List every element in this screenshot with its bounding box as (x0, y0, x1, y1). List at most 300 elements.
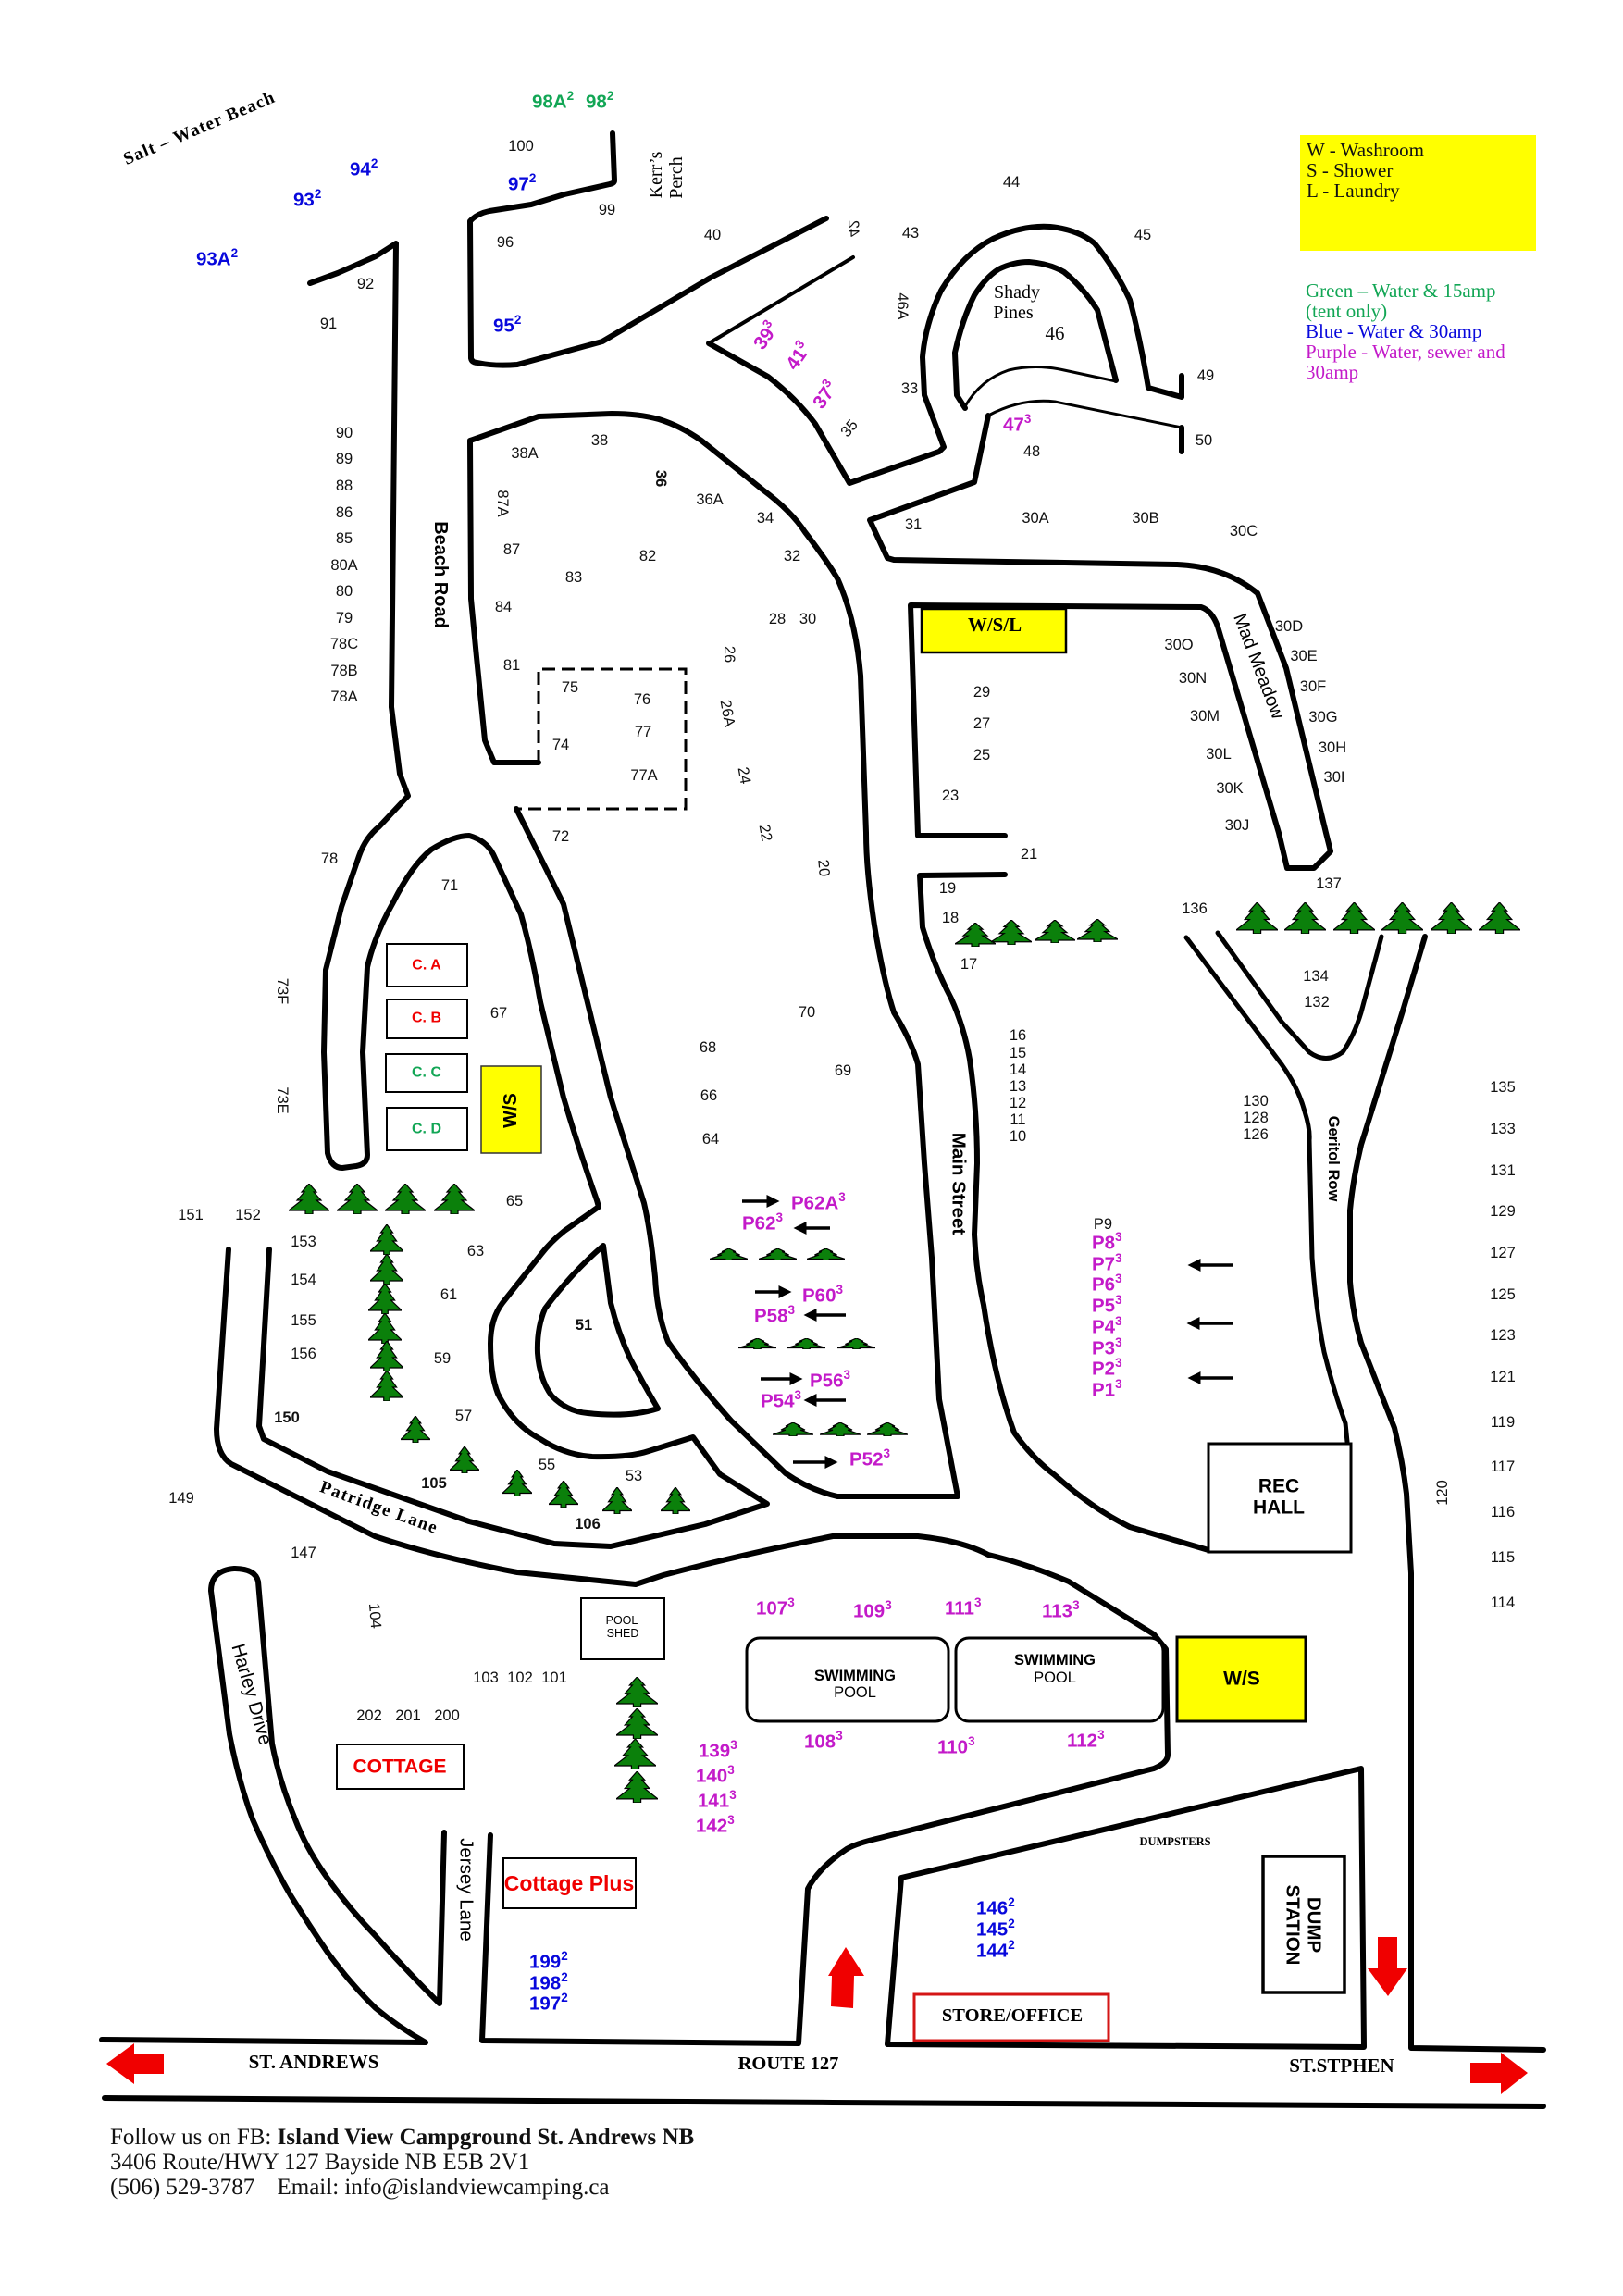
coloured service sites: purple: 140 (696, 1766, 727, 1786)
site numbers: 126 (1243, 1126, 1269, 1143)
coloured service sites: blue: 2 (315, 187, 321, 200)
coloured service sites: purple: 3 (1115, 1334, 1122, 1349)
building: dump station: DUMP (1303, 1897, 1325, 1953)
site numbers: 38A (511, 445, 539, 462)
area and road names (120, 88, 1394, 2077)
coloured service sites: purple: P1 (1092, 1379, 1115, 1401)
site numbers: 82 (639, 548, 656, 565)
site numbers: 129 (1490, 1203, 1516, 1220)
red arrow: to St. Andrews (106, 2043, 164, 2084)
coloured service sites: purple: 139 (699, 1740, 730, 1762)
site numbers: 133 (1490, 1121, 1516, 1137)
site numbers: 87A (494, 490, 511, 517)
coloured service sites: purple: 3 (883, 1446, 890, 1460)
coloured service sites: blue: 198 (529, 1973, 561, 1993)
site numbers: 135 (1490, 1079, 1516, 1096)
area and road names: ST. ANDREWS (249, 2051, 378, 2073)
site numbers: 128 (1243, 1110, 1269, 1126)
site numbers: 30I (1324, 769, 1344, 786)
site numbers: 99 (599, 202, 615, 218)
site numbers: 86 (336, 504, 353, 521)
coloured service sites: purple: P60 (802, 1285, 836, 1307)
site numbers: 59 (434, 1350, 451, 1367)
coloured service sites: blue: 2 (371, 155, 378, 170)
site numbers: 66 (700, 1087, 717, 1104)
site numbers: 73F (274, 978, 291, 1004)
site numbers: 116 (1491, 1504, 1515, 1520)
site numbers: 149 (168, 1490, 194, 1507)
site numbers: 68 (700, 1039, 716, 1056)
area and road names: Shady (994, 282, 1040, 303)
site numbers: 77 (635, 724, 651, 740)
site numbers: 14 (1010, 1061, 1026, 1078)
swimming pool 2: POOL (1034, 1669, 1076, 1686)
road outlines (102, 133, 1543, 2106)
site numbers: 63 (467, 1243, 484, 1260)
coloured service sites: blue: 146 (976, 1897, 1008, 1919)
coloured service sites: blue: 2 (561, 1969, 568, 1984)
coloured service sites: purple: 3 (1115, 1272, 1122, 1285)
coloured service sites: green: 2 (607, 89, 613, 102)
area and road names: Beach Road (430, 521, 451, 628)
site numbers: 200 (434, 1707, 460, 1724)
site numbers: 72 (552, 828, 569, 845)
site numbers: 33 (901, 380, 918, 397)
coloured service sites: purple: 3 (1115, 1251, 1122, 1264)
site numbers: 104 (365, 1603, 384, 1629)
black site arrows (742, 1201, 1233, 1462)
site numbers: 81 (503, 657, 520, 674)
site numbers: 20 (814, 859, 833, 877)
coloured service sites: blue: 199 (529, 1951, 561, 1973)
coloured service sites: blue: 95 (493, 315, 514, 337)
site numbers: 137 (1316, 875, 1342, 892)
red arrow: entrance (828, 1947, 864, 2008)
building: W/S small (481, 1066, 541, 1153)
site numbers: 201 (395, 1707, 421, 1724)
site numbers: 30J (1225, 817, 1249, 834)
building: cottage: COTTAGE (353, 1756, 447, 1777)
site numbers: 24 (735, 765, 753, 786)
coloured service sites: blue: 94 (350, 159, 371, 180)
site numbers: 80A (330, 557, 358, 574)
coloured service sites: blue: 2 (1008, 1895, 1015, 1908)
area and road names: ROUTE 127 (738, 2054, 838, 2074)
site numbers: 117 (1491, 1458, 1515, 1475)
site numbers: 40 (704, 227, 721, 243)
site numbers: 65 (506, 1193, 523, 1210)
coloured service sites: purple: 108 (804, 1731, 836, 1753)
coloured service sites: blue: 2 (561, 1990, 568, 2004)
site numbers: 38 (591, 432, 608, 449)
coloured service sites: purple: 47 (1003, 415, 1024, 435)
site numbers: 45 (1134, 227, 1151, 243)
building: dump station: STATION (1282, 1885, 1303, 1965)
red arrow: exit (1368, 1937, 1407, 1996)
coloured service sites: purple: 113 (1042, 1601, 1072, 1621)
site numbers: 30A (1022, 510, 1049, 527)
site numbers: 74 (552, 737, 569, 753)
site numbers: 87 (503, 541, 520, 558)
site numbers: 44 (1003, 174, 1020, 191)
site numbers: 30G (1308, 709, 1338, 726)
site numbers: 96 (497, 234, 514, 251)
coloured service sites: blue: 144 (976, 1940, 1008, 1962)
site numbers: 30M (1190, 708, 1220, 725)
coloured service sites: purple: 41 (782, 344, 812, 374)
site numbers: 134 (1303, 968, 1329, 985)
site numbers: 106 (575, 1516, 601, 1533)
site numbers: 27 (973, 715, 990, 732)
site numbers: 36A (696, 491, 724, 508)
legend: site colours: Purple - Water, sewer and (1306, 341, 1505, 363)
site numbers: 154 (291, 1272, 316, 1288)
building: cottage plus (503, 1858, 636, 1908)
coloured service sites: green (532, 89, 613, 113)
legend: site colours: (tent only) (1306, 300, 1387, 322)
area and road names: Mad Meadow (1229, 611, 1288, 723)
legend: facilities: L - Laundry (1307, 180, 1400, 202)
coloured service sites: purple: 3 (836, 1283, 843, 1296)
building: W/S large: W/S (1223, 1668, 1260, 1690)
site numbers: 79 (336, 610, 353, 627)
building: rec hall: HALL (1253, 1497, 1305, 1518)
coloured service sites: purple: 3 (1115, 1292, 1122, 1307)
site numbers: 100 (508, 138, 534, 155)
site numbers: 13 (1010, 1078, 1026, 1095)
site numbers: 83 (565, 569, 582, 586)
building: store/office: STORE/OFFICE (942, 2005, 1083, 2026)
coloured service sites: purple: 3 (730, 1738, 737, 1751)
legend: facilities: W - Washroom (1307, 139, 1424, 161)
coloured service sites: blue: 2 (231, 246, 238, 259)
area and road names: Salt – Water Beach (120, 88, 278, 169)
building: pool shed (581, 1598, 664, 1659)
site numbers: 30F (1300, 678, 1326, 695)
cabin: C. A (387, 944, 467, 987)
coloured service sites: purple: 3 (775, 1210, 783, 1223)
site numbers: 105 (421, 1475, 447, 1492)
site numbers: P9 (1094, 1216, 1112, 1233)
legend: site colours: Green – Water & 15amp (1306, 279, 1496, 302)
site numbers: 80 (336, 583, 353, 600)
site numbers: 101 (541, 1669, 567, 1686)
site numbers: 92 (357, 276, 374, 292)
site numbers: 51 (576, 1317, 592, 1334)
area and road names: Patridge Lane (317, 1477, 440, 1538)
trees (289, 902, 1520, 1803)
coloured service sites: blue: 2 (1008, 1938, 1015, 1951)
coloured service sites: purple: 112 (1067, 1731, 1097, 1751)
building: W/S small: W/S (501, 1093, 521, 1128)
site numbers: 21 (1021, 846, 1037, 863)
coloured service sites: purple: 3 (794, 1388, 801, 1401)
site numbers: 127 (1490, 1245, 1516, 1261)
site numbers: 147 (291, 1545, 316, 1561)
coloured service sites: purple: 3 (729, 1788, 737, 1801)
area and road names: Jersey Lane (455, 1838, 477, 1942)
site numbers: 75 (562, 679, 578, 696)
coloured service sites: purple: P8 (1092, 1233, 1115, 1253)
area and road names: ST.STPHEN (1289, 2054, 1394, 2077)
site numbers: 150 (274, 1409, 300, 1426)
site numbers: 43 (902, 225, 919, 242)
coloured service sites: blue: 2 (561, 1949, 568, 1962)
footer contact text: (506) 529-3787 Email: info@islandviewcamping.ca (110, 2175, 610, 2200)
coloured service sites: purple: 3 (843, 1368, 850, 1381)
site numbers: 102 (507, 1669, 533, 1686)
swimming pool 1: POOL (834, 1684, 876, 1701)
coloured service sites: purple: 3 (760, 316, 774, 330)
site numbers: 136 (1182, 900, 1208, 917)
coloured service sites: purple (696, 316, 1122, 1836)
coloured service sites: blue: 93 (293, 189, 315, 211)
coloured service sites: purple: 3 (1024, 411, 1032, 426)
legend: facilities: S - Shower (1307, 159, 1393, 181)
site numbers: 53 (626, 1468, 642, 1484)
site numbers: 121 (1490, 1369, 1516, 1385)
cabin: C. C (386, 1054, 467, 1092)
coloured service sites: purple: 3 (1115, 1229, 1122, 1244)
coloured service sites: purple: P4 (1092, 1316, 1115, 1338)
site numbers: 114 (1491, 1595, 1515, 1611)
site numbers: 30N (1179, 670, 1207, 687)
building: dump station (1263, 1856, 1344, 1992)
site numbers: 30E (1290, 648, 1318, 664)
site numbers: 28 (769, 611, 786, 627)
site numbers: 30D (1275, 618, 1303, 635)
building: rec hall: REC (1258, 1475, 1299, 1497)
site numbers: 29 (973, 684, 990, 701)
coloured service sites: purple: 3 (838, 1190, 846, 1203)
building: pool shed: POOL (606, 1614, 638, 1627)
site numbers: 30H (1319, 739, 1346, 756)
red arrow: to St. Stephen (1470, 2053, 1528, 2094)
coloured service sites: purple: P6 (1092, 1273, 1115, 1296)
swimming pool 2: SWIMMING (1014, 1652, 1096, 1669)
coloured service sites: blue: 2 (529, 170, 536, 185)
area and road names: Harley Drive (227, 1642, 277, 1747)
coloured service sites: purple: 3 (1115, 1377, 1122, 1390)
site numbers: 123 (1490, 1327, 1516, 1344)
building: cottage (337, 1744, 464, 1789)
coloured service sites: purple: 3 (836, 1729, 843, 1742)
site numbers: 30O (1164, 637, 1194, 653)
site numbers: 61 (440, 1286, 457, 1303)
site numbers: 152 (235, 1207, 261, 1223)
site numbers: 12 (1010, 1095, 1026, 1111)
site numbers: 76 (634, 691, 650, 708)
site numbers: 67 (490, 1005, 507, 1022)
site numbers: 46 (1046, 322, 1064, 344)
site numbers: 131 (1490, 1162, 1516, 1179)
legend: site colours: 30amp (1306, 361, 1358, 383)
coloured service sites: purple: 3 (792, 337, 807, 351)
site numbers: 36 (652, 470, 669, 487)
coloured service sites: blue: 2 (514, 313, 521, 326)
site numbers: 55 (539, 1457, 555, 1473)
coloured service sites: purple: 3 (787, 1303, 795, 1316)
site numbers: 23 (942, 788, 959, 804)
coloured service sites: purple: 110 (937, 1736, 968, 1758)
coloured service sites: purple: P52 (849, 1449, 883, 1470)
site numbers: 64 (702, 1131, 719, 1148)
building: W/S large (1177, 1637, 1306, 1721)
site numbers: 85 (336, 530, 353, 547)
site numbers: 73E (274, 1086, 291, 1114)
area and road names: Main Street (948, 1133, 970, 1235)
coloured service sites: blue: 197 (529, 1993, 561, 2014)
cabin: C. D: C. D (412, 1122, 441, 1136)
swimming pool 1 (747, 1638, 948, 1721)
coloured service sites: purple: P56 (810, 1370, 843, 1392)
site numbers: 57 (455, 1408, 472, 1424)
coloured service sites: blue: 2 (1008, 1916, 1015, 1930)
cabin: C. C: C. C (412, 1064, 441, 1081)
coloured service sites: purple: P2 (1092, 1359, 1115, 1379)
site numbers: 10 (1010, 1128, 1026, 1145)
island road around site 51 (538, 1246, 658, 1415)
legend: facilities (1300, 135, 1536, 251)
coloured service sites: purple: P7 (1092, 1253, 1115, 1275)
coloured service sites: purple: P62 (742, 1212, 775, 1235)
site numbers: 30K (1216, 780, 1244, 797)
coloured service sites: purple: 141 (698, 1790, 729, 1812)
site numbers: 30B (1132, 510, 1159, 527)
site numbers: 32 (784, 548, 800, 565)
site numbers: 42 (845, 220, 861, 237)
site numbers: 18 (942, 910, 959, 926)
coloured service sites: purple: 3 (1115, 1355, 1122, 1370)
coloured service sites: green: 98A (532, 91, 567, 113)
coloured service sites: purple: 3 (885, 1597, 892, 1612)
coloured service sites: purple: 37 (809, 383, 838, 413)
area and road names: DUMPSTERS (1139, 1835, 1211, 1848)
cabin: C. B: C. B (412, 1011, 441, 1025)
legend: site colours (1306, 279, 1505, 383)
coloured service sites: purple: P62A (791, 1192, 838, 1214)
site numbers: 132 (1304, 994, 1330, 1011)
site numbers: 15 (1010, 1045, 1026, 1061)
area and road names: Geritol Row (1325, 1116, 1342, 1201)
site numbers: 130 (1243, 1093, 1269, 1110)
building: cottage plus: Cottage Plus (504, 1871, 634, 1895)
area and road names: Pines (993, 303, 1034, 323)
site numbers: 34 (757, 510, 774, 527)
coloured service sites: purple: 3 (727, 1812, 735, 1827)
site numbers: 35 (837, 416, 861, 441)
site numbers: 115 (1491, 1549, 1515, 1566)
site numbers: 30 (799, 611, 816, 627)
swimming pool 2 (956, 1638, 1163, 1721)
site numbers: 89 (336, 451, 353, 467)
coloured service sites: green: 98 (586, 91, 607, 113)
coloured service sites: purple: 3 (1072, 1597, 1080, 1612)
site numbers: 49 (1197, 367, 1214, 384)
site numbers: 50 (1196, 432, 1212, 449)
building: pool shed: SHED (607, 1627, 638, 1640)
site numbers: 155 (291, 1312, 316, 1329)
site numbers: 120 (1434, 1480, 1451, 1506)
site numbers: 125 (1490, 1286, 1516, 1303)
area and road names: Kerr’s (646, 151, 666, 198)
building: store/office (914, 1994, 1109, 2041)
coloured service sites: purple: 107 (756, 1597, 787, 1620)
footer contact text: Follow us on FB: Island View Campground St. Andrews NB (110, 2125, 694, 2150)
coloured service sites: purple: 3 (1097, 1727, 1105, 1742)
coloured service sites: purple: 3 (727, 1762, 735, 1777)
site numbers: 69 (835, 1062, 851, 1079)
building: rec hall (1208, 1444, 1351, 1552)
coloured service sites: purple: 3 (1115, 1314, 1122, 1327)
coloured service sites: blue: 93A (196, 248, 231, 270)
site numbers: 30L (1206, 746, 1232, 763)
site numbers: 90 (336, 425, 353, 441)
coloured service sites: purple: 3 (968, 1734, 975, 1747)
footer contact text: 3406 Route/HWY 127 Bayside NB E5B 2V1 (110, 2150, 529, 2175)
coloured service sites: purple: 109 (853, 1601, 885, 1621)
coloured service sites: green: 2 (567, 89, 574, 102)
site numbers: 31 (905, 516, 922, 533)
footer contact text (110, 2125, 694, 2200)
site numbers: 88 (336, 478, 353, 494)
site numbers: 30C (1230, 523, 1258, 540)
site numbers: 202 (356, 1707, 382, 1724)
cabin: C. A: C. A (412, 957, 441, 974)
site numbers: 78C (330, 636, 358, 652)
legend: site colours: Blue - Water & 30amp (1306, 320, 1481, 342)
coloured service sites: blue (196, 155, 1015, 2014)
coloured service sites: purple: P58 (754, 1305, 787, 1327)
coloured service sites: purple: 3 (819, 376, 834, 390)
site numbers: 19 (939, 880, 956, 897)
site numbers: 78 (321, 850, 338, 867)
site numbers: 70 (799, 1004, 815, 1021)
coloured service sites: purple: P54 (761, 1390, 794, 1412)
site numbers: 84 (495, 599, 512, 615)
coloured service sites: purple: 142 (696, 1816, 727, 1836)
site numbers: 119 (1491, 1414, 1515, 1431)
site numbers: 11 (1010, 1111, 1026, 1128)
cabin: C. D (387, 1108, 467, 1150)
coloured service sites: purple: 3 (787, 1595, 795, 1608)
site numbers: 103 (473, 1669, 499, 1686)
site numbers: 153 (291, 1234, 316, 1250)
site numbers: 78A (330, 689, 358, 705)
site numbers: 17 (960, 956, 977, 973)
site numbers: 25 (973, 747, 990, 763)
site numbers: 91 (320, 316, 337, 332)
site numbers: 46A (894, 292, 911, 320)
building: W/S/L: W/S/L (968, 614, 1022, 636)
site numbers: 151 (178, 1207, 204, 1223)
site numbers: 77A (630, 767, 658, 784)
building: W/S/L (922, 609, 1066, 652)
site numbers: 48 (1023, 443, 1040, 460)
swimming pool 1: SWIMMING (814, 1668, 896, 1684)
site numbers: 22 (756, 823, 774, 843)
coloured service sites: purple: 111 (945, 1597, 974, 1620)
site numbers (168, 138, 1516, 1724)
coloured service sites: blue: 97 (508, 174, 529, 194)
coloured service sites: purple: 39 (750, 324, 779, 354)
site numbers: 71 (441, 877, 458, 894)
site numbers: 26 (721, 646, 737, 663)
coloured service sites: purple: P5 (1092, 1296, 1115, 1316)
site numbers: 78B (330, 663, 358, 679)
site numbers: 26A (717, 699, 737, 728)
area and road names: Perch (666, 156, 687, 199)
